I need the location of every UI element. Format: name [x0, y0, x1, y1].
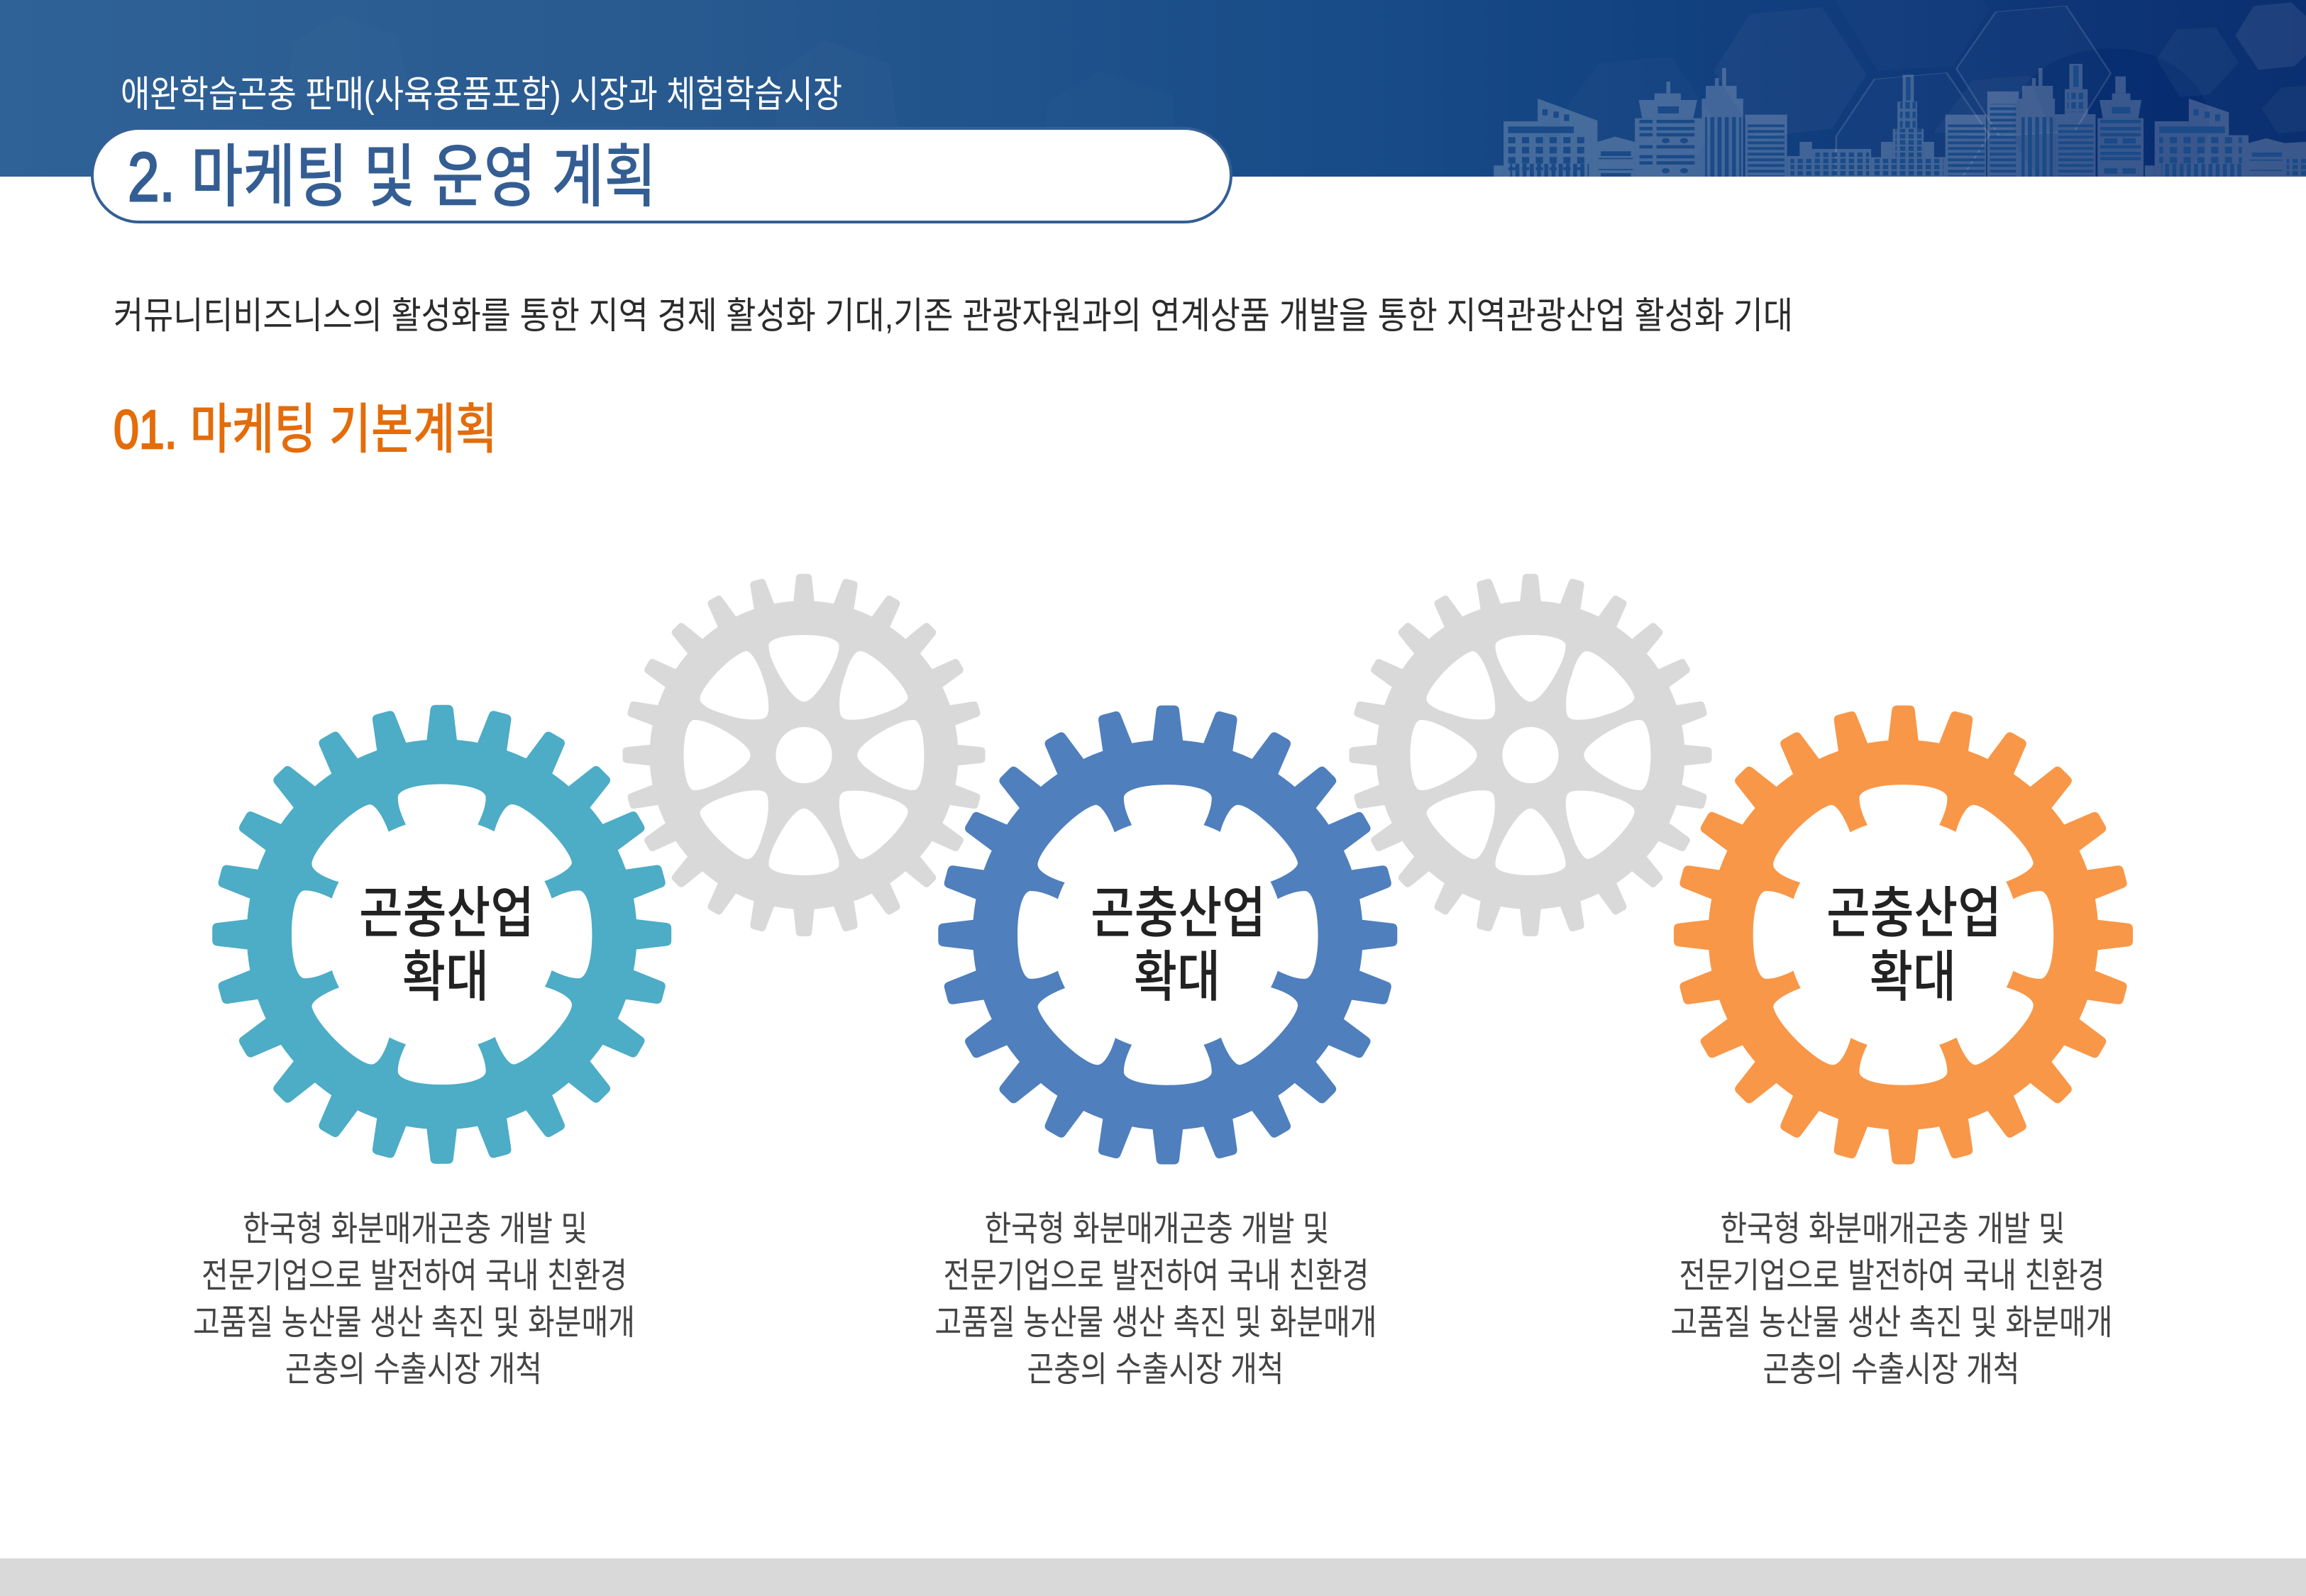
description: orange column: 곤충의 수출시장 개척: [1762, 1351, 2019, 1389]
description: teal column: 전문기업으로 발전하여 국내 친환경: [202, 1257, 627, 1295]
description: blue column: 고품질 농산물 생산 촉진 및 화분매개: [935, 1304, 1377, 1342]
description: blue column: 곤충의 수출시장 개척: [1027, 1351, 1284, 1389]
gear label: blue: 확대: [1134, 946, 1220, 1008]
description: orange column: [1670, 1210, 2113, 1389]
gear: teal: [212, 705, 671, 1164]
gear label: orange: [1826, 882, 2002, 1008]
section heading: 01. 마케팅 기본계획: [114, 399, 497, 460]
gear label: teal: 확대: [402, 946, 489, 1008]
footer bar: [0, 1558, 2306, 1596]
gear label: blue: 곤충산업: [1091, 882, 1266, 944]
description: teal column: 고품질 농산물 생산 촉진 및 화분매개: [193, 1304, 635, 1342]
header background hexagons: [286, 0, 2306, 197]
gear: gray left: [623, 574, 985, 936]
intro text: 커뮤니티비즈니스의 활성화를 통한 지역 경제 활성화 기대,기존 관광자원과의 연계상품 개발을 통한 지역관광산업 활성화 기대: [114, 296, 1793, 337]
gear: blue: [938, 705, 1397, 1165]
description: blue column: 전문기업으로 발전하여 국내 친환경: [944, 1257, 1369, 1295]
gear label: teal: 곤충산업: [359, 882, 534, 944]
gear label: teal: [359, 882, 534, 1008]
description: orange column: 전문기업으로 발전하여 국내 친환경: [1679, 1257, 2104, 1295]
gear: gray right: [1350, 574, 1711, 936]
city skyline: [1494, 64, 2306, 177]
header band: [0, 0, 2306, 177]
gear: orange: [1674, 705, 2133, 1165]
skyline windows: [1508, 66, 2306, 177]
title pill: [92, 128, 1231, 222]
description: orange column: 한국형 화분매개곤충 개발 및: [1720, 1210, 2065, 1248]
gear label: orange: 확대: [1870, 946, 1956, 1008]
description: teal column: 한국형 화분매개곤충 개발 및: [243, 1210, 587, 1248]
description: teal column: [193, 1210, 635, 1389]
gear label: orange: 곤충산업: [1826, 882, 2002, 944]
description: blue column: 한국형 화분매개곤충 개발 및: [985, 1210, 1330, 1248]
gear label: blue: [1091, 882, 1266, 1008]
description: teal column: 곤충의 수출시장 개척: [285, 1351, 542, 1389]
subtitle: 애완학습곤충 판매(사육용품포함) 시장과 체험학습시장: [121, 74, 842, 116]
description: blue column: [935, 1210, 1377, 1389]
title text: 2. 마케팅 및 운영 계획: [128, 138, 656, 216]
description: orange column: 고품질 농산물 생산 촉진 및 화분매개: [1670, 1304, 2113, 1342]
